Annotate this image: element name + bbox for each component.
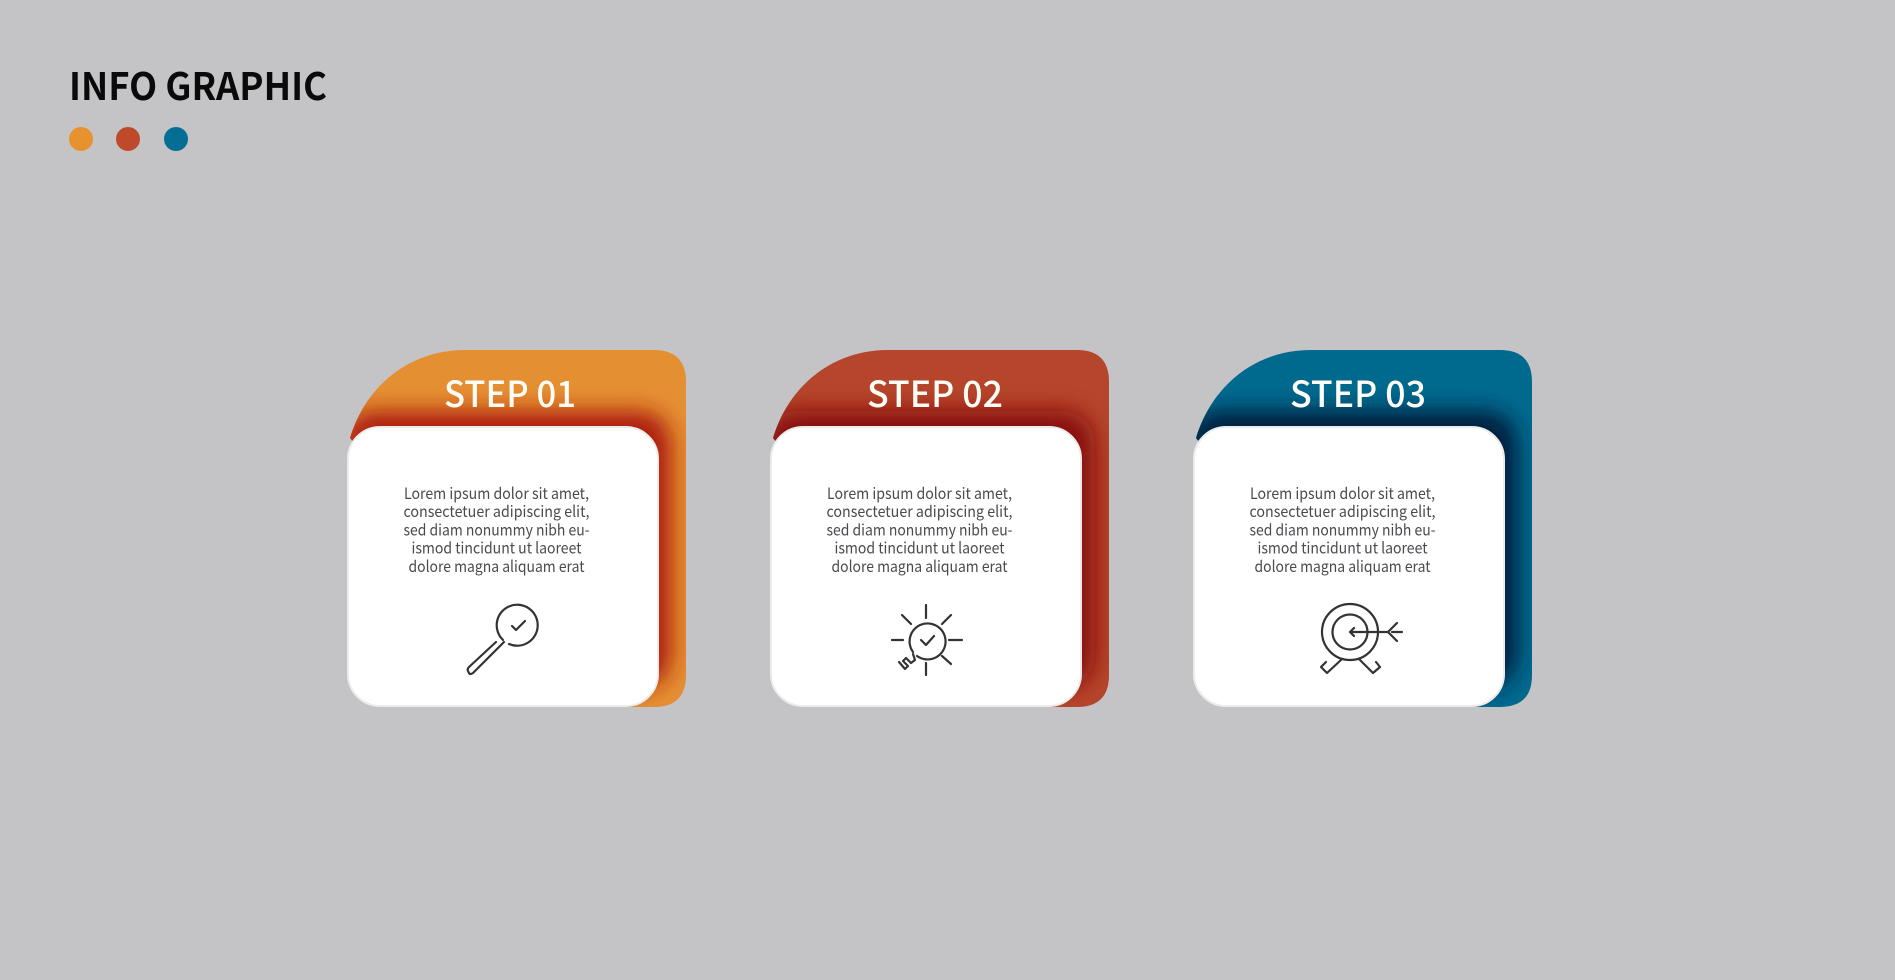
text block: consectetuer adipiscing elit,: [404, 500, 590, 522]
text block: dolore magna aliquam erat: [1254, 555, 1431, 577]
text block: [404, 482, 590, 577]
text block: Lorem ipsum dolor sit amet,: [1250, 482, 1435, 504]
panel back: red: [773, 350, 1109, 707]
text block: [1250, 482, 1436, 577]
text block: Lorem ipsum dolor sit amet,: [404, 482, 589, 504]
icon: light bulb with check: [892, 605, 962, 675]
icon: magnifier with check: [468, 605, 538, 674]
icon: target with arrow: [1321, 604, 1402, 673]
panel: step 02: [765, 350, 1109, 707]
white card: [771, 427, 1081, 706]
text block: dolore magna aliquam erat: [408, 555, 585, 577]
heading: step 03: STEP 03: [1290, 366, 1426, 418]
text block: dolore magna aliquam erat: [832, 555, 1008, 577]
title: INFO GRAPHIC: [69, 56, 327, 111]
text block: consectetuer adipiscing elit,: [1250, 500, 1436, 522]
panel: step 03: [1188, 350, 1532, 707]
text block: [826, 482, 1012, 577]
white card: [348, 427, 658, 706]
heading: step 02: STEP 02: [867, 366, 1003, 418]
panel back: orange: [350, 350, 686, 707]
text block: sed diam nonummy nibh eu-: [404, 518, 590, 540]
text block: ismod tincidunt ut laoreet: [1258, 536, 1428, 558]
inner shadow: [765, 411, 1094, 688]
text block: Lorem ipsum dolor sit amet,: [827, 482, 1012, 504]
panel back: teal: [1196, 350, 1532, 707]
inner shadow: [342, 411, 671, 688]
heading: step 01: STEP 01: [444, 366, 576, 418]
text block: ismod tincidunt ut laoreet: [412, 536, 582, 558]
text block: ismod tincidunt ut laoreet: [834, 536, 1005, 558]
text block: sed diam nonummy nibh eu-: [1250, 518, 1436, 540]
white card: [1194, 427, 1504, 706]
panel: step 01: [342, 350, 686, 707]
text block: consectetuer adipiscing elit,: [826, 500, 1012, 522]
colour dots: [69, 127, 188, 151]
inner shadow: [1188, 411, 1517, 688]
text block: sed diam nonummy nibh eu-: [826, 518, 1012, 540]
